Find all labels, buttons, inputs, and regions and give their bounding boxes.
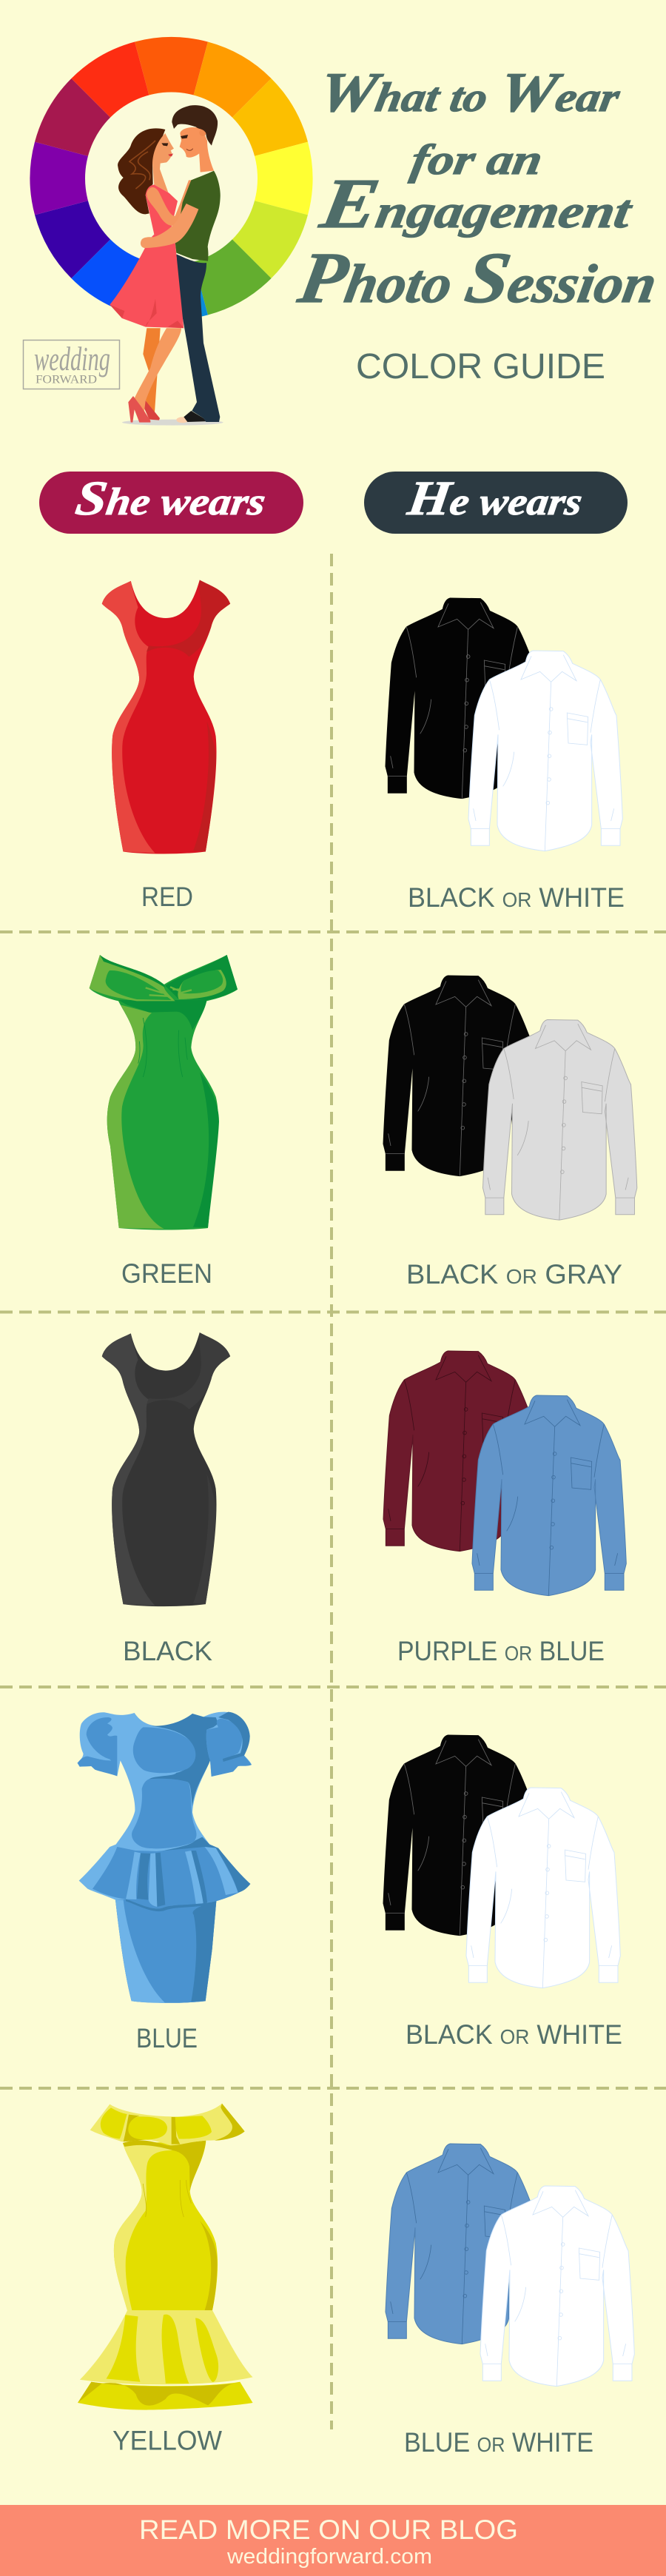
panel: row 2 he wears black or gray (383, 976, 637, 1289)
icon: blue shirt (386, 2144, 539, 2344)
pill heading: she wears: She wears (73, 472, 269, 526)
label: black: BLACK (123, 1636, 212, 1666)
panel: row 3 she wears black (102, 1332, 230, 1666)
title: What to Wear (314, 61, 626, 124)
title: Photo Session (292, 238, 664, 318)
label: blue: BLUE (136, 2023, 198, 2053)
label: black or white: BLACK OR WHITE (408, 882, 625, 913)
title: Engagement (314, 164, 640, 243)
icon: maroon shirt (383, 1351, 537, 1552)
label: blue or white: BLUE OR WHITE (404, 2427, 593, 2458)
panel: row 1 she wears red (102, 580, 230, 912)
logo: wedding forward: wedding (34, 340, 110, 378)
icon: white shirt (468, 651, 622, 851)
label: black or gray: BLACK OR GRAY (406, 1259, 622, 1289)
subtitle: COLOR GUIDE (356, 347, 605, 386)
logo: wedding forward (24, 340, 120, 389)
icon: black shirt (383, 976, 537, 1176)
icon: blue peplum dress (77, 1712, 252, 2003)
icon: gray shirt (482, 1020, 637, 1220)
icon: black shirt (383, 1735, 537, 1936)
color wheel (30, 37, 312, 320)
footer banner: READ MORE ON OUR BLOG (139, 2515, 518, 2545)
pill heading: she wears (39, 472, 303, 534)
icon: blue shirt (472, 1395, 626, 1596)
pill heading: he wears: He wears (404, 472, 586, 526)
icon: yellow ruffled dress (78, 2104, 253, 2410)
logo: wedding forward: FORWARD (36, 373, 97, 386)
panel: row 1 he wears black or white (386, 598, 625, 913)
icon: black shirt (386, 598, 539, 799)
panel: row 4 she wears blue (77, 1712, 252, 2053)
panel: row 5 he wears blue or white (386, 2144, 634, 2458)
icon: red dress (102, 580, 230, 853)
title (292, 61, 664, 318)
panel: row 3 he wears purple or blue (383, 1351, 626, 1666)
icon: white shirt (466, 1788, 620, 1988)
footer banner: weddingforward.com (226, 2545, 432, 2569)
illustration: couple embracing (110, 105, 223, 426)
panel: row 5 she wears yellow (78, 2104, 253, 2456)
label: yellow: YELLOW (112, 2425, 222, 2456)
icon: black dress (102, 1332, 230, 1606)
icon: green dress (90, 955, 238, 1230)
footer banner (0, 2505, 666, 2576)
icon: white shirt (480, 2186, 634, 2387)
panel: row 2 she wears green (90, 955, 238, 1289)
label: black or white: BLACK OR WHITE (406, 2019, 622, 2050)
label: red: RED (141, 882, 193, 912)
title: for an (408, 135, 546, 184)
pill heading: he wears (364, 472, 628, 534)
label: purple or blue: PURPLE OR BLUE (397, 1636, 605, 1666)
panel: row 4 he wears black or white (383, 1735, 622, 2050)
label: green: GREEN (121, 1258, 212, 1289)
